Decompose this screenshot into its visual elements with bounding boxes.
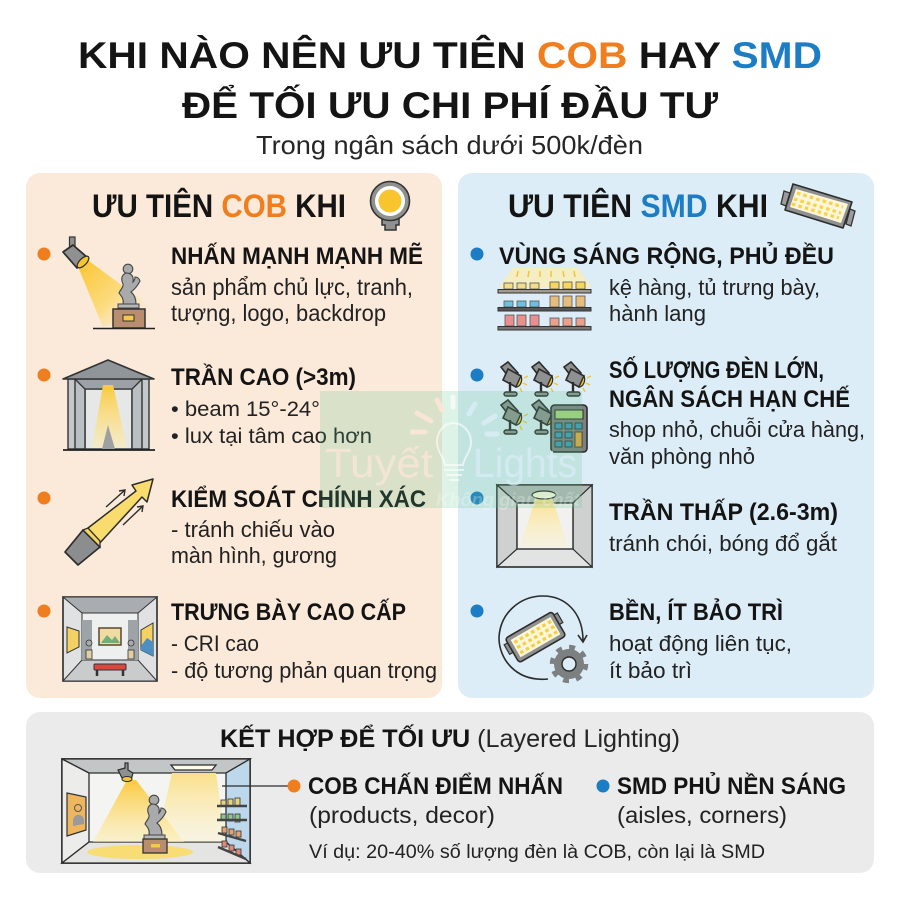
icon: SMD panel bbox=[781, 184, 855, 228]
watermark: Tuyết Lights: Lights bbox=[473, 440, 577, 486]
panel: combined lighting bbox=[26, 712, 874, 873]
text: vùng sáng: kệ hàng, tủ trưng bày, bbox=[609, 275, 820, 300]
text: số lượng đèn: SỐ LƯỢNG ĐÈN LỚN, bbox=[609, 356, 824, 384]
text: bền: hoạt động liên tục, bbox=[609, 631, 792, 656]
icon: COB lamp bbox=[370, 182, 410, 230]
text: trưng bày: - độ tương phản quan trọng bbox=[171, 658, 437, 683]
text: trưng bày bbox=[171, 598, 437, 683]
text: kiểm soát: màn hình, gương bbox=[171, 543, 337, 568]
bullet: SMD bbox=[596, 780, 610, 792]
text: COB highlights: (products, decor) bbox=[309, 802, 495, 828]
text: SMD base bbox=[617, 771, 846, 828]
text: trần cao: • lux tại tâm cao hơn bbox=[171, 425, 372, 448]
subtitle: Trong ngân sách dưới 500k/đèn bbox=[256, 130, 643, 160]
icon: gallery room bbox=[63, 597, 157, 681]
item: trần cao bbox=[38, 360, 372, 450]
text: nhấn mạnh: sản phẩm chủ lực, tranh, bbox=[171, 274, 413, 300]
text: số lượng đèn: NGÂN SÁCH HẠN CHẾ bbox=[609, 385, 850, 413]
text: trần cao bbox=[171, 363, 372, 448]
COB heading: ƯU TIÊN COB KHI bbox=[92, 188, 346, 224]
icon: spotlight and statue bbox=[63, 237, 155, 328]
item: trần thấp bbox=[470, 485, 838, 567]
text: vùng sáng: hành lang bbox=[609, 301, 706, 326]
watermark: Tuyết Lights bbox=[320, 391, 582, 510]
text: kiểm soát: KIỂM SOÁT CHÍNH XÁC bbox=[171, 485, 426, 513]
watermark: Tuyết Lights: Không gian chất bbox=[436, 490, 581, 510]
text: example: Ví dụ: 20-40% số lượng đèn là COB, còn lại là SMD bbox=[309, 842, 765, 863]
item: số lượng đèn bbox=[470, 356, 865, 469]
text: trưng bày: TRƯNG BÀY CAO CẤP bbox=[171, 598, 406, 626]
watermark: Tuyết Lights: Tuyết bbox=[325, 440, 434, 486]
text: bền bbox=[609, 597, 792, 683]
panel: COB bbox=[26, 173, 442, 698]
item: nhấn mạnh bbox=[38, 237, 423, 328]
title: ĐỂ TỐI ƯU CHI PHÍ ĐẦU TƯ bbox=[182, 84, 718, 126]
text: trần cao: TRẦN CAO (>3m) bbox=[171, 363, 356, 391]
item: bền bbox=[470, 596, 792, 683]
combined heading: KẾT HỢP ĐỂ TỐI ƯU (Layered Lighting) bbox=[220, 723, 680, 753]
icon: panel and gear bbox=[499, 596, 587, 681]
text: bền: BỀN, ÍT BẢO TRÌ bbox=[609, 597, 783, 626]
text: số lượng đèn: shop nhỏ, chuỗi cửa hàng, bbox=[609, 417, 865, 442]
item: trưng bày bbox=[38, 597, 437, 683]
item: kiểm soát bbox=[38, 479, 426, 568]
panel: SMD bbox=[458, 173, 874, 698]
text: kiểm soát bbox=[171, 485, 426, 568]
text: trần thấp: tránh chói, bóng đổ gắt bbox=[609, 531, 837, 556]
icon: low ceiling room bbox=[497, 485, 592, 567]
bullet: COB bbox=[288, 780, 300, 792]
text: vùng sáng: VÙNG SÁNG RỘNG, PHỦ ĐỀU bbox=[499, 241, 834, 270]
text: trưng bày: - CRI cao bbox=[171, 631, 259, 656]
SMD heading: ƯU TIÊN SMD KHI bbox=[508, 188, 768, 224]
text: nhấn mạnh: tượng, logo, backdrop bbox=[171, 300, 386, 326]
icon: layered lighting room bbox=[62, 759, 250, 863]
text: SMD base: SMD PHỦ NỀN SÁNG bbox=[617, 771, 846, 800]
connector line bbox=[222, 785, 294, 787]
icon: flashlight arrow bbox=[65, 479, 153, 565]
icon: high ceiling bbox=[63, 360, 155, 450]
text: trần cao: • beam 15°-24° bbox=[171, 398, 320, 421]
title bbox=[78, 34, 822, 126]
text: trần thấp bbox=[609, 498, 838, 556]
title: KHI NÀO NÊN ƯU TIÊN COB HAY SMD bbox=[78, 34, 822, 76]
text: COB highlights: COB CHẤN ĐIỂM NHẤN bbox=[308, 772, 563, 800]
icon: lit shelves bbox=[498, 268, 592, 330]
text: số lượng đèn bbox=[609, 356, 865, 469]
text: nhấn mạnh bbox=[171, 242, 423, 326]
text: SMD base: (aisles, corners) bbox=[617, 802, 787, 828]
icon: lamps and calculator bbox=[501, 362, 591, 452]
text: COB highlights bbox=[308, 772, 563, 828]
text: nhấn mạnh: NHẤN MẠNH MẠNH MẼ bbox=[171, 242, 423, 270]
text: kiểm soát: - tránh chiếu vào bbox=[171, 517, 335, 542]
text: bền: ít bảo trì bbox=[609, 658, 692, 683]
item: vùng sáng bbox=[470, 241, 834, 330]
text: trần thấp: TRẦN THẤP (2.6-3m) bbox=[609, 498, 838, 526]
text: vùng sáng bbox=[499, 241, 834, 326]
text: số lượng đèn: văn phòng nhỏ bbox=[609, 444, 755, 469]
